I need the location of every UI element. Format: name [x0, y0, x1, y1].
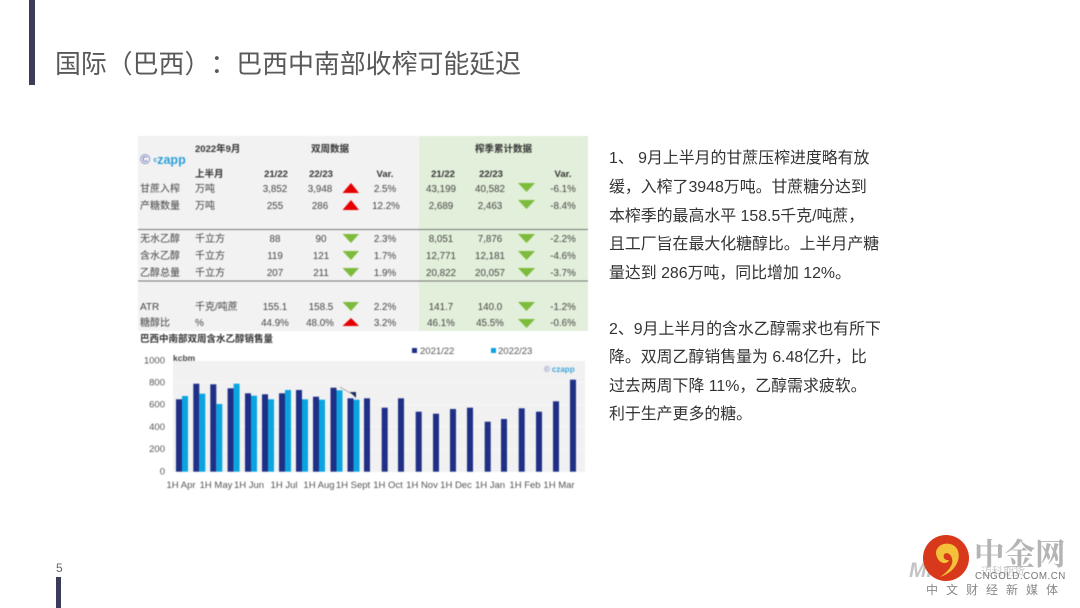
- table row labels and units: 万吨: [195, 182, 215, 195]
- table header labels: 22/23: [479, 169, 503, 180]
- table values: 43,199: [426, 184, 456, 195]
- table header labels: 双周数据: [311, 143, 350, 155]
- table values: 88: [270, 234, 281, 245]
- logo: czapp: ©: [140, 151, 151, 167]
- x axis labels: 1H Apr: [166, 480, 196, 491]
- table row labels and units: %: [195, 318, 204, 329]
- table values: 20,057: [475, 268, 505, 279]
- y axis labels: 200: [149, 444, 165, 455]
- chart title: 巴西中南部双周含水乙醇销售量: [140, 333, 274, 345]
- y axis labels: 400: [149, 422, 165, 433]
- table header labels: 21/22: [431, 169, 455, 180]
- table values: [261, 184, 576, 329]
- table header labels: 21/22: [264, 169, 288, 180]
- tagline: 中文财经新媒体: [926, 582, 1066, 597]
- paragraph 1: [609, 149, 879, 282]
- table values: 211: [313, 268, 329, 279]
- y axis labels: 1000: [144, 356, 165, 366]
- table values: 1.9%: [374, 268, 396, 279]
- x axis labels: 1H Jun: [234, 480, 264, 491]
- page number: 5: [56, 561, 63, 575]
- table values: -4.6%: [550, 251, 576, 262]
- table header labels: [195, 143, 571, 180]
- legend: 2022/23: [498, 346, 532, 357]
- table row labels and units: 万吨: [195, 199, 215, 212]
- table values: 46.1%: [427, 318, 455, 329]
- table values: 12.2%: [372, 201, 400, 212]
- table header labels: 22/23: [309, 169, 333, 180]
- table values: 119: [267, 251, 283, 262]
- table row labels and units: [140, 182, 238, 329]
- table values: 12,181: [475, 251, 505, 262]
- table values: 286: [312, 201, 329, 212]
- table values: -6.1%: [550, 184, 576, 195]
- x axis labels: 1H Jul: [271, 480, 297, 491]
- chart: Brazil centre-south biweekly hydrous ethanol sales: [140, 332, 585, 491]
- accent bar: bottom left: [56, 577, 61, 608]
- text: 本榨季的最高水平 158.5千克/吨蔗，: [609, 208, 864, 225]
- table header labels: Var.: [377, 169, 393, 180]
- table header labels: 榨季累计数据: [475, 143, 533, 155]
- table values: -3.7%: [550, 268, 576, 279]
- bars 2021/22: [176, 380, 576, 472]
- sub brand: 迈科期货: [981, 564, 1025, 578]
- table values: 207: [267, 268, 283, 279]
- text: 利于生产更多的糖。: [609, 406, 752, 423]
- table values: 2.2%: [374, 302, 396, 313]
- table values: 155.1: [263, 302, 287, 313]
- table row labels and units: 糖醇比: [140, 316, 170, 329]
- text: 且工厂旨在最大化糖醇比。上半月产糖: [609, 236, 879, 253]
- table values: 121: [313, 251, 329, 262]
- table row labels and units: 千立方: [195, 249, 225, 262]
- table values: 1.7%: [374, 251, 396, 262]
- accent bar: top left: [29, 0, 35, 85]
- text: 缓，入榨了3948万吨。甘蔗糖分达到: [609, 179, 867, 196]
- table values: 20,822: [426, 268, 456, 279]
- x axis labels: 1H Jan: [475, 480, 505, 491]
- table values: 45.5%: [476, 318, 504, 329]
- table values: 8,051: [429, 234, 453, 245]
- text: 过去两周下降 11%，乙醇需求疲软。: [609, 378, 867, 395]
- table values: 2,463: [478, 201, 503, 212]
- table values: 141.7: [429, 302, 453, 313]
- bars 2022/23: [182, 384, 360, 472]
- table values: 255: [267, 201, 284, 212]
- green down arrows: [342, 183, 535, 328]
- text: 降。双周乙醇销售量为 6.48亿升，比: [609, 349, 867, 366]
- table row labels and units: 千立方: [195, 232, 225, 245]
- icon: red circle with swirl: [923, 535, 969, 581]
- x axis labels: 1H Feb: [509, 480, 541, 491]
- text: 1、 9月上半月的甘蔗压榨进度略有放: [609, 150, 869, 167]
- table values: 7,876: [478, 234, 503, 245]
- x axis labels: 1H Nov: [406, 480, 438, 491]
- trend arrow: [340, 387, 356, 398]
- table row labels and units: 乙醇总量: [140, 266, 180, 279]
- table row labels and units: 产糖数量: [140, 199, 180, 212]
- x axis labels: 1H Mar: [543, 480, 575, 491]
- table row labels and units: 千立方: [195, 266, 225, 279]
- domain: CNGOLD.COM.CN: [975, 571, 1066, 582]
- x axis labels: 1H Sept: [336, 480, 371, 491]
- table values: 2.5%: [374, 184, 396, 195]
- red up arrows: [342, 183, 359, 326]
- table values: 48.0%: [306, 318, 334, 329]
- text: 量达到 286万吨，同比增加 12%。: [609, 265, 851, 282]
- wordmark: 中金网: [974, 530, 1066, 574]
- text: 2、9月上半月的含水乙醇需求也有所下: [609, 321, 881, 338]
- table row labels and units: 无水乙醇: [140, 232, 180, 245]
- y axis labels: 600: [149, 400, 165, 410]
- legend: 2021/22: [420, 346, 454, 357]
- table values: 12,771: [426, 251, 456, 262]
- x axis labels: 1H Oct: [373, 480, 403, 491]
- table row labels and units: 千克/吨蔗: [195, 300, 238, 313]
- table values: 40,582: [475, 184, 505, 195]
- table values: 2.3%: [374, 234, 396, 245]
- x axis labels: [166, 480, 575, 491]
- table values: -8.4%: [550, 201, 576, 212]
- table header labels: 2022年9月: [195, 143, 240, 155]
- title: 国际（巴西）：巴西中南部收榨可能延迟: [55, 51, 521, 79]
- x axis labels: 1H Aug: [303, 480, 335, 491]
- table values: 3.2%: [374, 318, 396, 329]
- y axis unit: kcbm: [173, 353, 196, 363]
- table values: 3,948: [308, 184, 333, 195]
- table values: -2.2%: [550, 234, 576, 245]
- table header labels: Var.: [555, 169, 571, 180]
- table row labels and units: ATR: [140, 302, 159, 313]
- table values: 44.9%: [261, 318, 289, 329]
- y axis labels: 0: [160, 466, 165, 478]
- table values: 2,689: [429, 201, 453, 212]
- logo: czapp small: ©czapp: [544, 365, 575, 374]
- x axis labels: 1H Dec: [440, 480, 472, 491]
- table values: -0.6%: [550, 318, 576, 329]
- table row labels and units: 含水乙醇: [140, 249, 180, 262]
- logo: czapp: c: [153, 157, 157, 164]
- table values: -1.2%: [550, 302, 576, 313]
- y axis labels: [144, 356, 165, 478]
- plot background: [173, 361, 585, 472]
- x axis labels: 1H May: [200, 480, 233, 491]
- legend: [412, 346, 532, 357]
- paragraph 2: [609, 320, 881, 423]
- panel: sugar and ethanol data table: [138, 136, 588, 332]
- logo: czapp: zapp: [157, 153, 186, 167]
- text block: commentary: [609, 149, 881, 423]
- table header labels: 上半月: [195, 168, 224, 180]
- watermark logo: 中金网: [909, 530, 1066, 597]
- table values: 158.5: [309, 302, 334, 313]
- table values: 90: [316, 234, 327, 245]
- watermark text: Mike: [909, 559, 956, 582]
- table values: 140.0: [478, 302, 503, 313]
- y axis labels: 800: [149, 378, 165, 388]
- table values: 3,852: [263, 184, 287, 195]
- table row labels and units: 甘蔗入榨: [140, 182, 180, 195]
